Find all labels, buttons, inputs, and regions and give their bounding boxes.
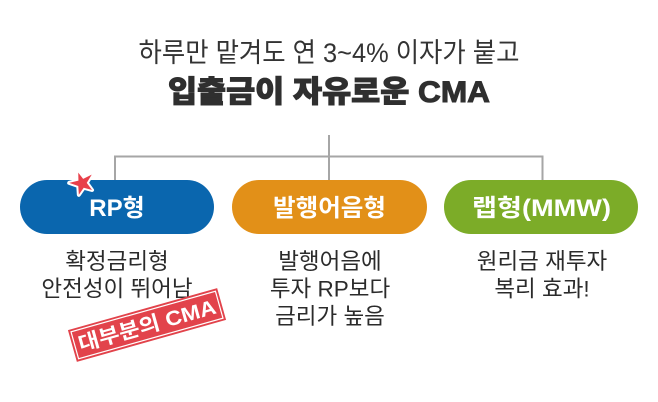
pill: RP type: [20, 180, 214, 234]
connector lines: [115, 135, 542, 180]
stamp: most CMAs: 대부분의 CMA: [76, 296, 219, 356]
icon: red star: [67, 169, 97, 197]
description: commercial paper type: 발행어음에: [278, 249, 382, 274]
pill: wrap type: [444, 180, 638, 234]
description: wrap type: 원리금 재투자: [477, 249, 608, 274]
stamp: most CMAs: [68, 288, 226, 362]
description: commercial paper type: 금리가 높음: [275, 304, 385, 329]
description: wrap type: 복리 효과!: [494, 276, 590, 302]
description: RP type: 확정금리형: [65, 249, 169, 274]
pill: commercial paper type: [232, 180, 427, 234]
label: commercial paper type: 발행어음형: [273, 195, 386, 222]
label: RP type: RP형: [89, 195, 145, 222]
label: wrap type: 랩형(MMW): [472, 195, 611, 222]
title: second line: 입출금이 자유로운 CMA: [168, 76, 490, 109]
title: first line: 하루만 맡겨도 연 3~4% 이자가 붙고: [138, 38, 520, 68]
panel: RP type: [20, 180, 214, 302]
description: RP type: 안전성이 뛰어남: [41, 276, 193, 302]
panel: wrap type: [444, 180, 638, 302]
panel: commercial paper type: [232, 180, 427, 329]
description: commercial paper type: 투자 RP보다: [270, 276, 390, 302]
